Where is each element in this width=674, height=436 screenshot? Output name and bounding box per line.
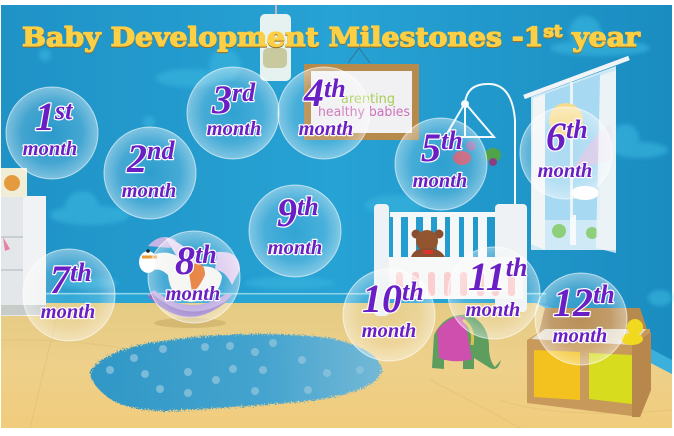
bubble: 7th month: th — [70, 258, 92, 287]
frame logo text — [318, 92, 410, 120]
teddy bear — [411, 230, 445, 257]
bubble: 12th month: th — [593, 280, 615, 309]
bubble: 1st month — [6, 87, 98, 179]
frame logo text: arenting — [341, 92, 395, 107]
bubble: 6th month: month — [538, 160, 592, 182]
bubble: 1st month: month — [23, 138, 77, 160]
bubble: 4th month: 4 — [303, 70, 324, 115]
bubble: 5th month: th — [441, 126, 463, 155]
bubble: 10th month — [343, 269, 435, 361]
bubble: 10th month: th — [402, 277, 424, 306]
bubble: 12th month: month — [553, 325, 607, 347]
bubble: 10th month: month — [362, 320, 416, 342]
bubble: 7th month: month — [41, 301, 95, 323]
title: Baby Development Milestones -1 — [22, 23, 500, 53]
bubble: 5th month: month — [413, 170, 467, 192]
bubble: 11th month: 11 — [468, 254, 506, 299]
picture frame — [304, 48, 419, 140]
bubble: 7th month — [23, 249, 115, 341]
bubble: 4th month: th — [324, 74, 346, 103]
hanging lamp — [260, 5, 291, 81]
rug — [90, 334, 382, 411]
rocking horse — [139, 237, 240, 328]
bubble: 2nd month: month — [122, 180, 176, 202]
bubble: 6th month: 6 — [546, 114, 566, 159]
bubble: 3rd month: rd — [232, 78, 256, 107]
bubble: 1st month: 1 — [35, 94, 55, 139]
bubble: 5th month: 5 — [421, 125, 441, 170]
bubble: 6th month: th — [566, 115, 588, 144]
bubble: 7th month: 7 — [50, 257, 72, 302]
bubble: 8th month: month — [166, 283, 220, 305]
bubble: 9th month: 9 — [277, 190, 297, 235]
bubble: 1st month: st — [54, 96, 73, 125]
elephant — [432, 315, 501, 369]
bubble: 9th month: month — [268, 237, 322, 259]
toy box — [527, 308, 651, 417]
bubble: 6th month — [520, 107, 612, 199]
bubble: 2nd month — [104, 127, 196, 219]
crib — [374, 204, 527, 316]
baby mobile — [445, 84, 515, 208]
bubble: 12th month: 12 — [553, 280, 593, 325]
title: year — [562, 23, 640, 53]
bubble: 8th month — [148, 231, 240, 323]
bubble: 9th month: th — [297, 192, 319, 221]
bubble: 2nd month: nd — [147, 136, 175, 165]
bubble: 2nd month: 2 — [126, 136, 147, 181]
bubble: 11th month: th — [506, 253, 527, 282]
bubble: 4th month: month — [299, 118, 353, 140]
bubble: 5th month — [395, 118, 487, 210]
bubble: 10th month: 10 — [362, 276, 402, 321]
bubble: 3rd month: month — [207, 118, 261, 140]
frame logo text: healthy babies — [318, 105, 410, 120]
bubble: 9th month — [249, 185, 341, 277]
bubble: 8th month: th — [195, 240, 217, 269]
bubble: 12th month — [535, 273, 627, 365]
bubble: 11th month — [448, 247, 540, 339]
bubble: 4th month — [278, 67, 370, 159]
bubble: 3rd month: 3 — [211, 77, 232, 122]
shelves — [1, 168, 46, 316]
window and curtains — [524, 58, 629, 253]
bubble: 3rd month — [187, 67, 279, 159]
title: st — [543, 22, 562, 42]
bubble: 8th month: 8 — [175, 238, 195, 283]
bubble: 11th month: month — [466, 299, 520, 321]
